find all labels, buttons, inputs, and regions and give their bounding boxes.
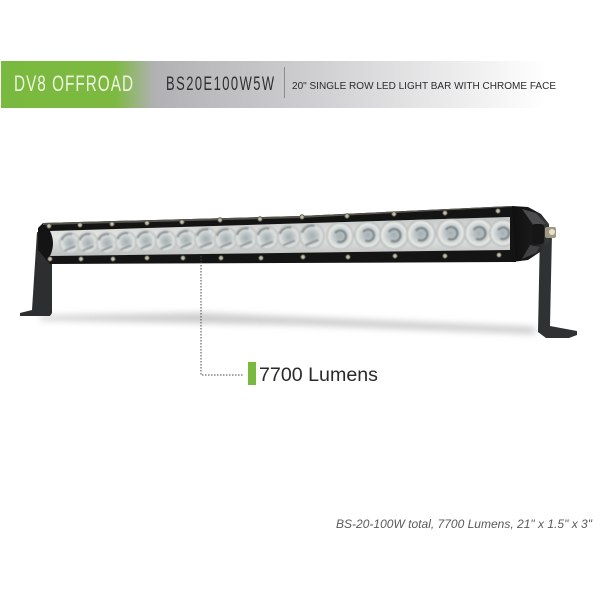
header band — [1, 61, 570, 108]
left mounting bracket — [20, 232, 52, 316]
header divider — [284, 67, 285, 98]
mounting bolt — [532, 224, 556, 244]
LED light bar — [20, 206, 577, 338]
callout label: 7700 Lumens — [259, 365, 378, 386]
lens left inset — [45, 231, 53, 256]
top screws — [47, 209, 500, 228]
right end cap — [512, 206, 549, 262]
infographic canvas — [1, 61, 592, 530]
callout leader line — [201, 256, 243, 375]
bottom screws — [48, 253, 501, 261]
chrome lens face — [50, 217, 510, 256]
LED reflectors — [59, 218, 517, 254]
right mounting bracket — [538, 232, 577, 338]
callout marker — [248, 362, 256, 385]
footnote specification: BS-20-100W total, 7700 Lumens, 21" x 1.5" x 3" — [336, 519, 593, 531]
bar housing — [38, 206, 516, 264]
part number: BS20E100W5W — [166, 74, 275, 95]
ground shadow — [40, 313, 535, 334]
brand name: DV8 OFFROAD — [14, 72, 133, 97]
product description: 20" SINGLE ROW LED LIGHT BAR WITH CHROME FACE — [292, 81, 556, 92]
